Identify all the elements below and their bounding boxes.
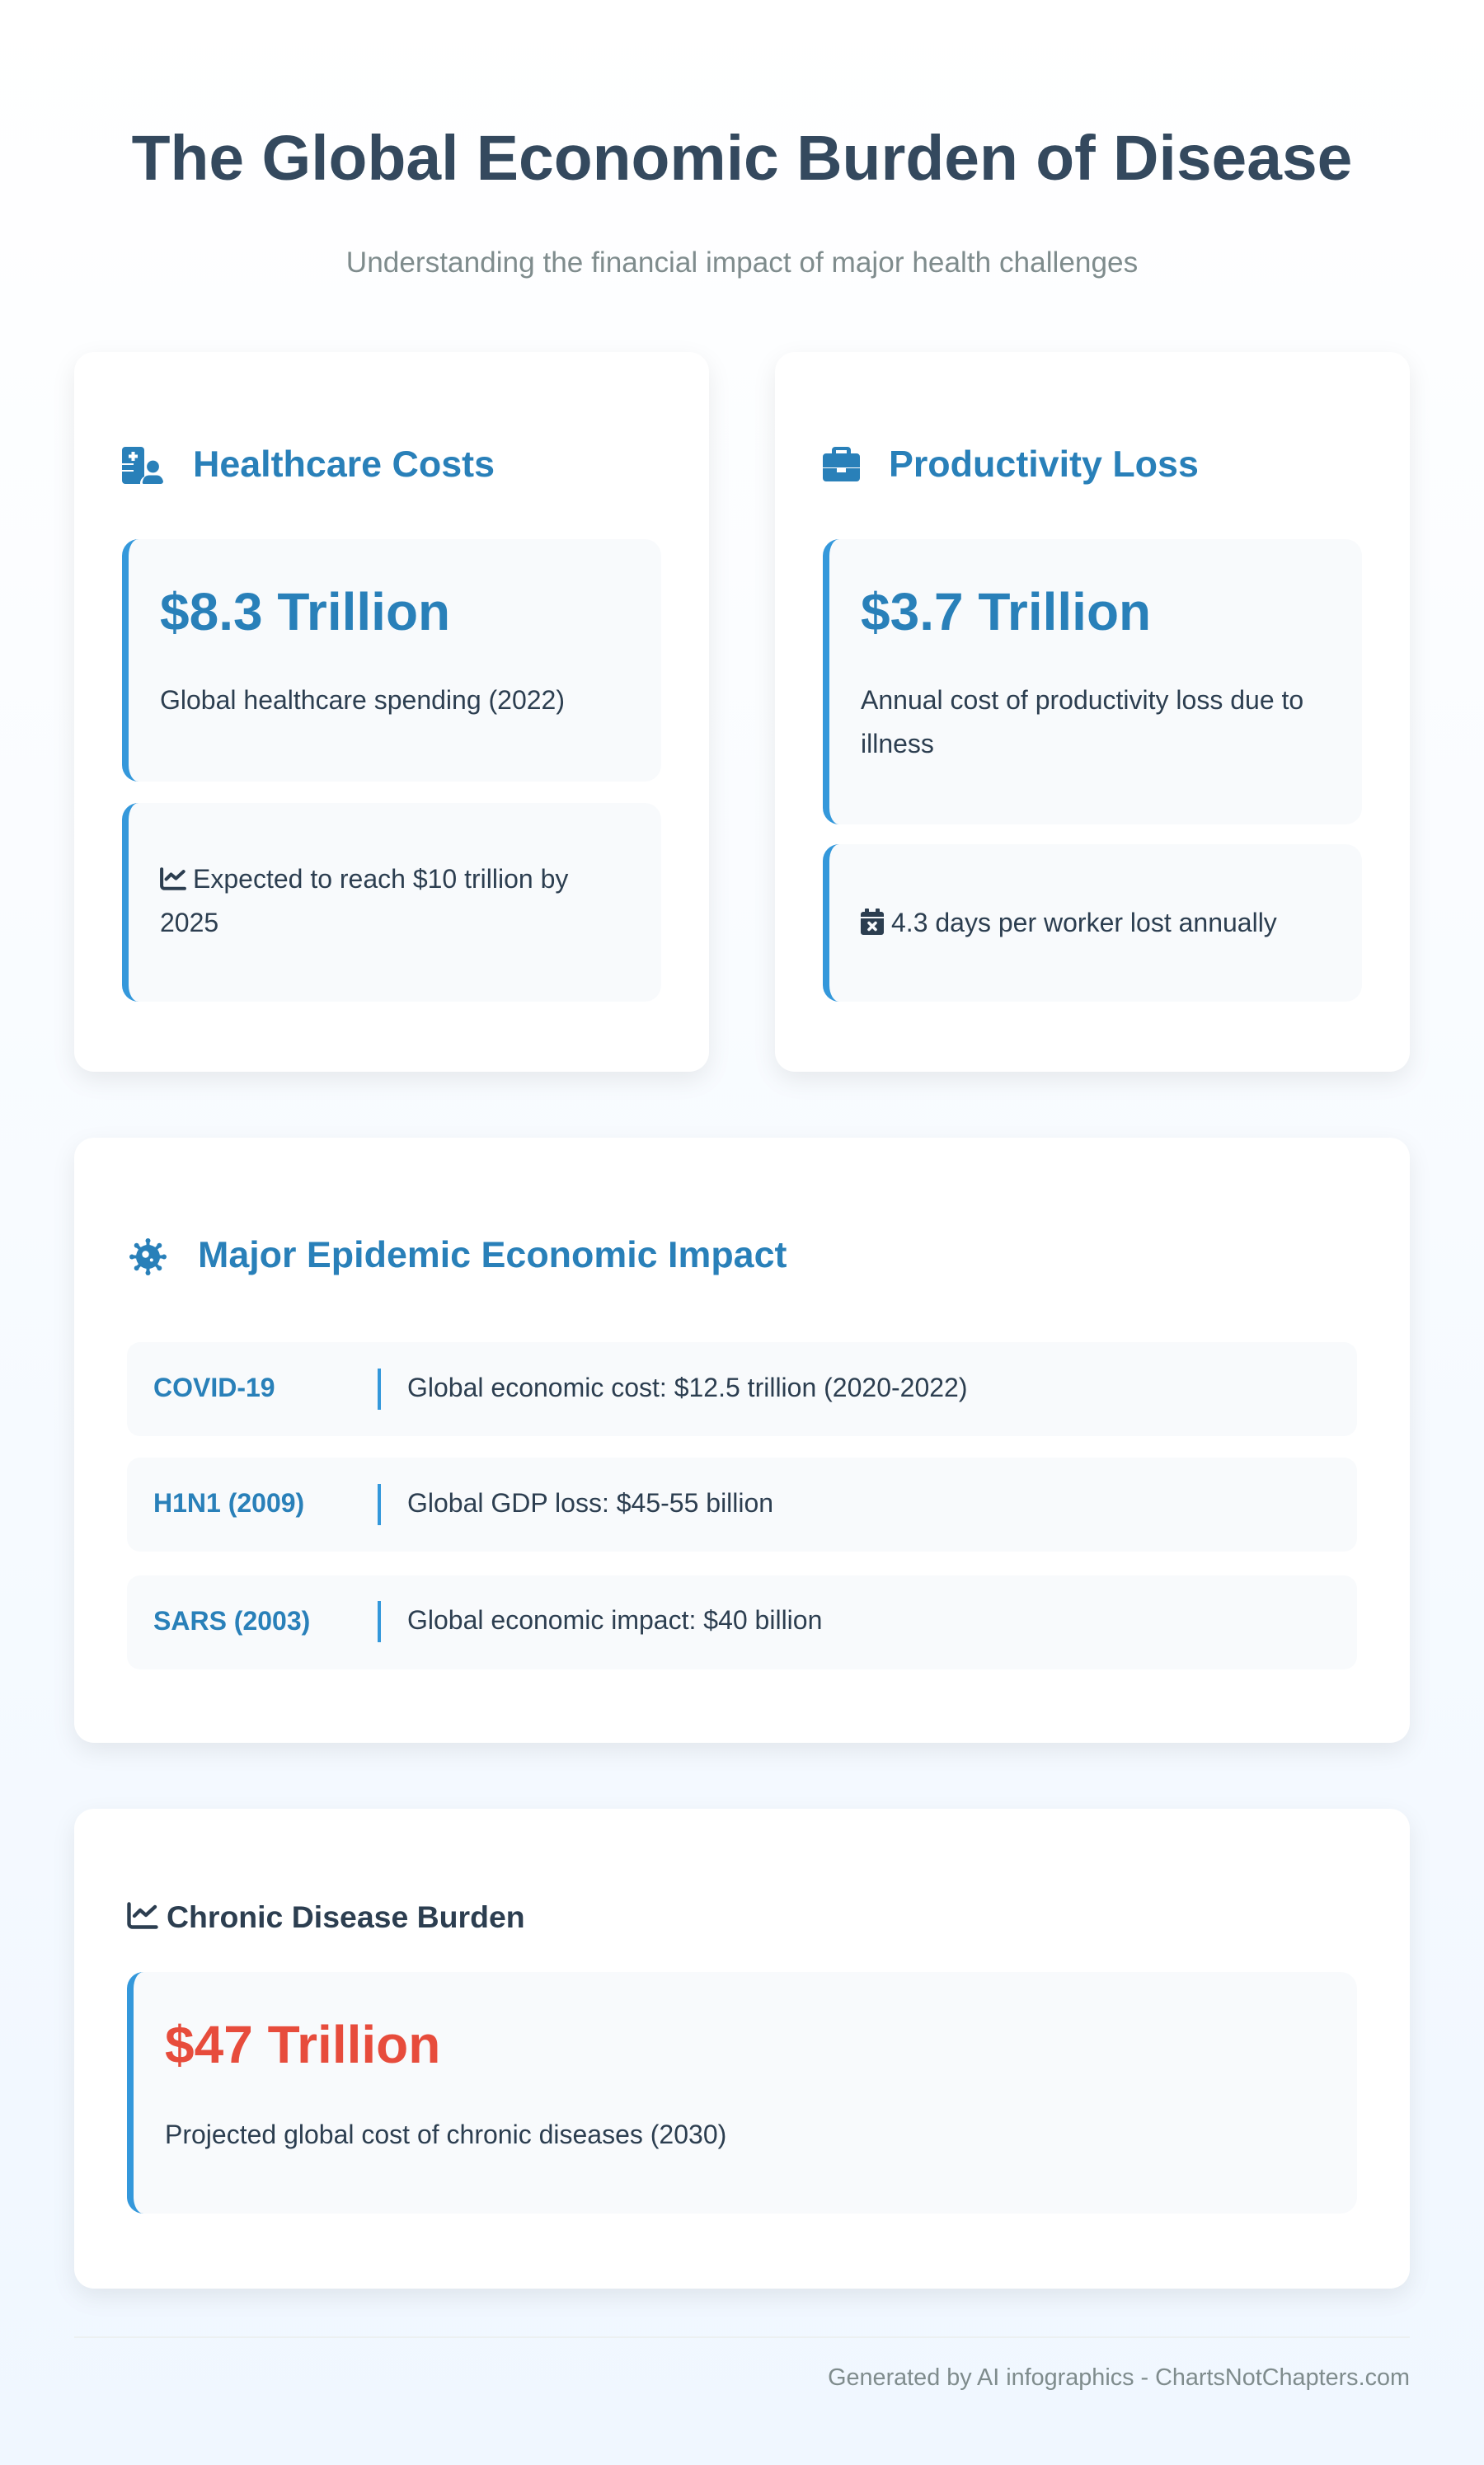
divider: [378, 1484, 381, 1525]
stat: global healthcare spending: [122, 539, 661, 782]
note text: [160, 864, 569, 937]
heading: healthcare costs: Healthcare Costs: [193, 444, 495, 485]
panel: chronic disease burden: [74, 1809, 1410, 2289]
note text: 4.3 days per worker lost annually: [891, 908, 1277, 937]
icon: chart line: [160, 867, 186, 890]
footer divider and credit: [74, 2336, 1410, 2396]
footer text: Generated by AI infographics - ChartsNotChapters.com: [828, 2364, 1410, 2391]
value: Global GDP loss: $45-55 billion: [407, 1488, 773, 1518]
note text: 2025: [160, 907, 218, 937]
divider: [378, 1369, 381, 1410]
note: expected to reach 10 trillion: [122, 803, 661, 1002]
row: sars: [127, 1575, 1357, 1669]
panel: productivity loss: [775, 352, 1410, 1072]
panel: healthcare costs: [74, 352, 709, 1072]
stat label: Global healthcare spending (2022): [160, 685, 565, 715]
heading: major epidemic: Major Epidemic Economic Impact: [198, 1234, 787, 1275]
stat label: [861, 685, 1303, 758]
stat label: Annual cost of productivity loss due to: [861, 685, 1303, 715]
panel: major epidemic economic impact: [74, 1138, 1410, 1743]
note text: Expected to reach $10 trillion by: [193, 864, 568, 894]
note: days lost: [823, 844, 1362, 1002]
label: SARS (2003): [153, 1606, 310, 1636]
stat: projected cost: [127, 1972, 1357, 2214]
value: Global economic impact: $40 billion: [407, 1605, 822, 1635]
stat value: $47 Trillion: [165, 2015, 440, 2074]
icon: briefcase: [823, 447, 860, 481]
value: Global economic cost: $12.5 trillion (2020-2022): [407, 1373, 967, 1402]
stat label: illness: [861, 729, 934, 758]
icon: hospital user: [122, 447, 163, 484]
label: H1N1 (2009): [153, 1488, 304, 1518]
stat value: $8.3 Trillion: [160, 582, 450, 641]
heading: chronic disease burden: Chronic Disease Burden: [167, 1899, 525, 1934]
stat: annual cost: [823, 539, 1362, 824]
label: COVID-19: [153, 1373, 275, 1402]
icon: virus: [129, 1238, 167, 1275]
stat value: $3.7 Trillion: [861, 582, 1151, 641]
subtitle: Understanding the financial impact of major health challenges: [346, 246, 1138, 279]
heading: productivity loss: Productivity Loss: [889, 444, 1199, 485]
title: The Global Economic Burden of Disease: [132, 123, 1352, 194]
divider: [378, 1601, 381, 1642]
stat label: Projected global cost of chronic diseases (2030): [165, 2120, 726, 2149]
row: covid-19: [127, 1342, 1357, 1436]
icon: calendar x: [861, 909, 884, 935]
icon: chart line: [127, 1902, 158, 1929]
row: h1n1: [127, 1458, 1357, 1552]
